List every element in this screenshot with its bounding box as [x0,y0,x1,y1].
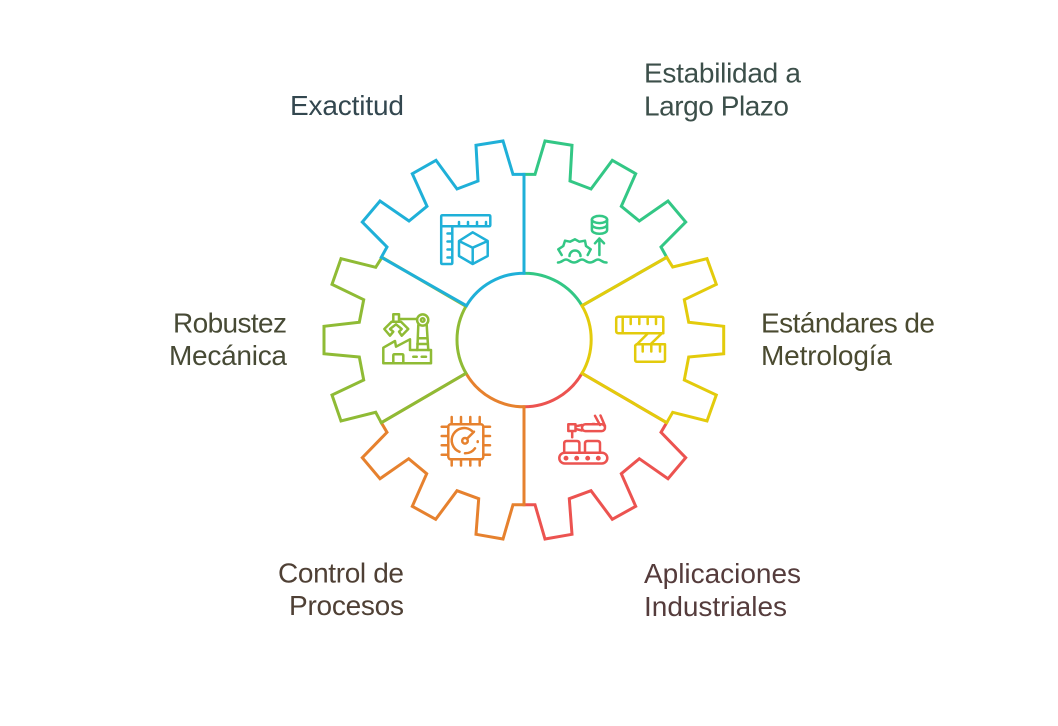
label: Control de Procesos: Procesos [289,590,404,621]
gear outline: lime [324,257,466,423]
segment: Robustez Mecánica [324,257,466,423]
label: Control de Procesos [278,558,404,621]
label: Estándares de Metrología [761,308,935,371]
gear outline: green [524,141,686,306]
label: Control de Procesos: Control de [278,558,404,588]
label: Aplicaciones Industriales: Industriales [644,591,787,622]
label: Exactitud: Exactitud [290,90,404,121]
gear outline: orange [362,373,524,539]
segment: Aplicaciones Industriales [524,373,686,539]
icon: chip with gauge [442,417,490,466]
label: Estabilidad a Largo Plazo: Largo Plazo [644,90,789,122]
label: Estabilidad a Largo Plazo [644,58,801,122]
icon: ruler and cube [441,215,490,264]
segment: Control de Procesos [362,373,524,539]
label: Aplicaciones Industriales: Aplicaciones [644,558,801,589]
label: Estándares de Metrología: Estándares de [761,308,935,338]
gear outline: yellow [582,257,724,423]
segment: Estándares de Metrología [582,257,724,423]
segment: Estabilidad a Largo Plazo [524,141,686,306]
icon: gear, water and database [558,216,607,262]
label: Estándares de Metrología: Metrología [761,340,892,371]
label: Robustez Mecánica [169,308,287,371]
label: Estabilidad a Largo Plazo: Estabilidad a [644,58,801,88]
icon: measuring tape [616,317,665,362]
label: Robustez Mecánica: Mecánica [169,340,287,371]
icon: robot arm on conveyor [559,416,607,464]
segment: Exactitud [362,141,524,306]
label: Aplicaciones Industriales [644,558,801,622]
gear outline: red [524,373,686,539]
gear outline: blue [362,141,524,306]
label: Robustez Mecánica: Robustez [173,308,287,338]
icon: factory with robotic claw [383,314,431,363]
